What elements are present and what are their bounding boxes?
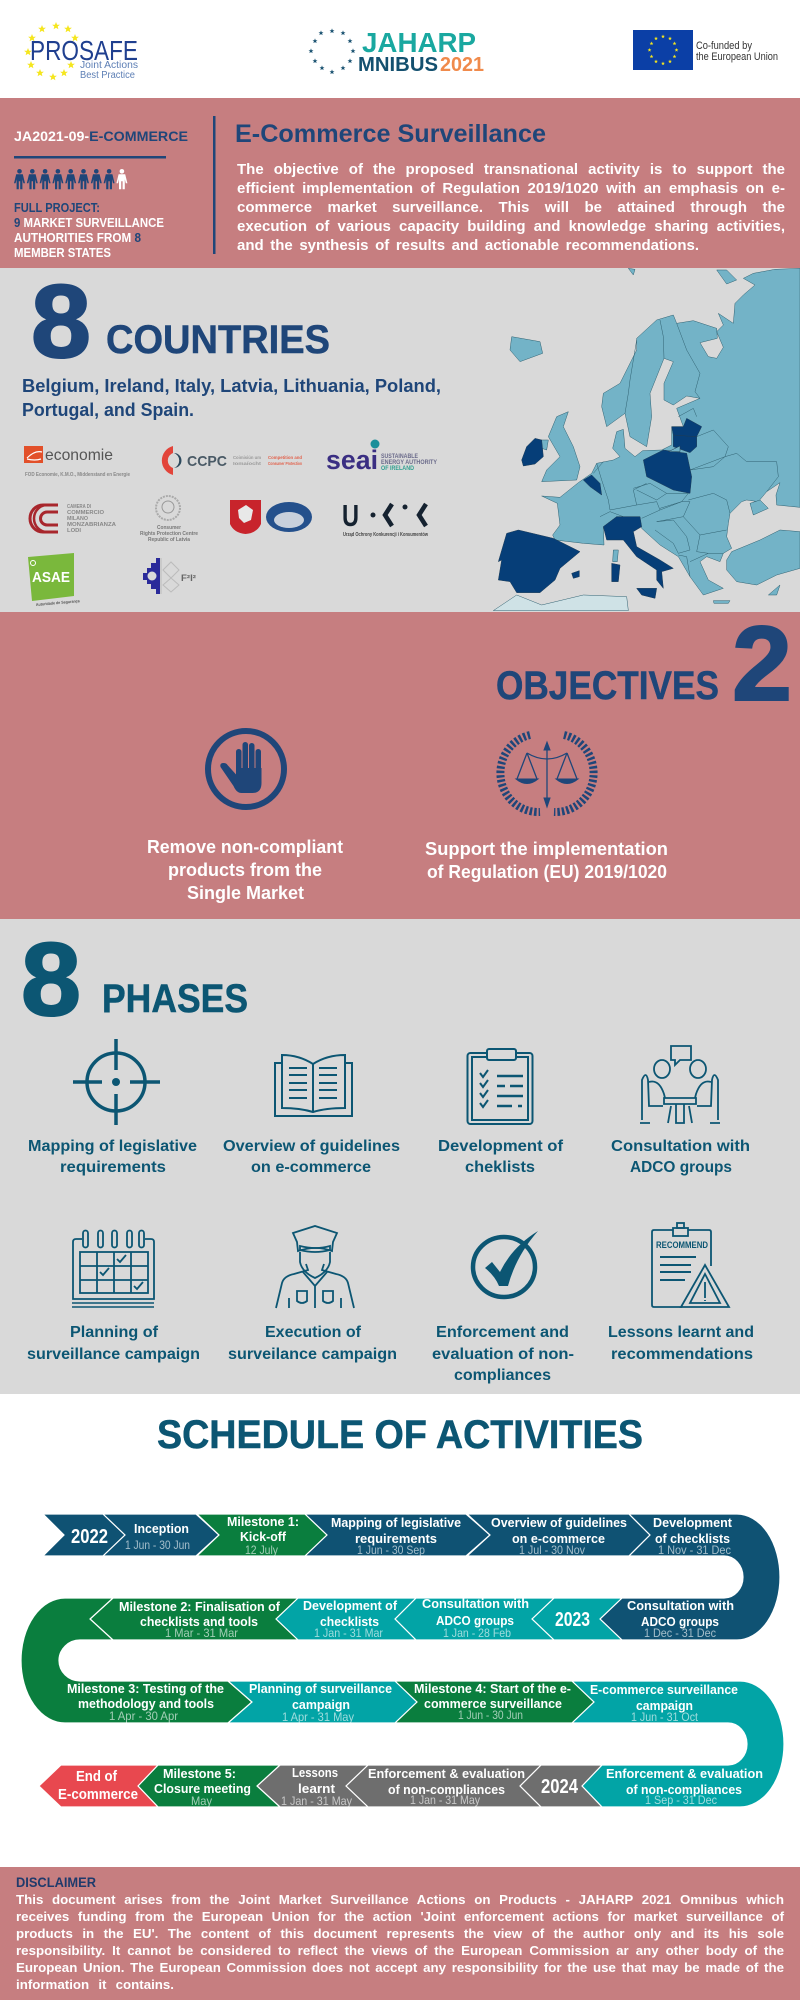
logo: Consumer Rights Protection Centre Latvia: Republic of Latvia [148, 537, 190, 543]
country list: Portugal, and Spain. [22, 400, 194, 420]
full project text [14, 201, 164, 260]
segment: e-commerce campaign and enforcement curve: 1 Jun - 31 Oct [631, 1710, 699, 1724]
segment: e-commerce campaign and enforcement curve [572, 1681, 784, 1807]
segment: milestone 4: 1 Jun - 30 Jun [458, 1708, 523, 1722]
disclaimer text: products in the EU'. The content of this document represents the view of the author only and its his sole [16, 1926, 784, 1941]
logo: Camera di Commercio: COMMERCIO [67, 510, 105, 516]
segment: lessons learnt [257, 1765, 368, 1808]
logo: economie: FOD Economie, K.M.O., Middenstand en Energie [25, 472, 130, 478]
segment: consultation 2023 [395, 1596, 554, 1640]
logo: UOKiK: Urząd Ochrony Konkurencji i Konsumentów [343, 532, 428, 538]
phase 8 label: Lessons learnt and [608, 1324, 754, 1341]
full project text: 9 MARKET SURVEILLANCE [14, 216, 164, 230]
segment: 2023: 2023 [555, 1609, 590, 1631]
phase 1 label: Mapping of legislative [28, 1138, 197, 1155]
segment: e-commerce campaign and enforcement curve: of non-compliances [626, 1782, 742, 1797]
phase 5 label [27, 1324, 200, 1363]
segment: planning: 1 Apr - 31 May [282, 1710, 354, 1724]
segment: mapping: Mapping of legislative [331, 1515, 461, 1530]
logo: ASAE: Autoridade de Segurança [36, 598, 81, 607]
phase 7 label: evaluation of non- [432, 1346, 574, 1363]
segment: milestone 2 [90, 1598, 298, 1640]
segment: overview: 1 Jul - 30 Nov [519, 1543, 585, 1557]
header objective paragraph [237, 161, 785, 254]
full project text: MEMBER STATES [14, 246, 111, 260]
segment: milestone 3 curve: 1 Apr - 30 Apr [109, 1709, 178, 1723]
phase 6 label: Execution of [265, 1324, 362, 1341]
segment: milestone 5: May [191, 1794, 212, 1808]
phase 7 label: Enforcement and [436, 1324, 569, 1341]
icon: stop hand [208, 731, 284, 807]
project code: JA2021-09-E-COMMERCE [14, 128, 188, 144]
panel: disclaimer background: DISCLAIMER [16, 1875, 96, 1890]
header objective paragraph: The objective of the proposed transnational activity is to support the [237, 161, 785, 178]
segment: consultation 2023: 1 Jan - 28 Feb [443, 1626, 511, 1640]
segment: milestone 1: Milestone 1: [227, 1514, 299, 1529]
header objective paragraph: execution of various capacity building and knowledge sharing activities, [237, 218, 785, 235]
panel: countries [0, 264, 800, 612]
logo: SEAI: OF IRELAND [381, 466, 415, 472]
icon: recommend clipboard with warning: RECOMMEND [656, 1240, 708, 1251]
phase 8 label [608, 1324, 754, 1363]
phase 8 label: recommendations [611, 1346, 753, 1363]
segment: enforcement 2024: of non-compliances [388, 1782, 505, 1797]
segment: consultation 2023: ADCO groups [436, 1613, 514, 1628]
segment: mapping: 1 Jun - 30 Sep [357, 1543, 425, 1557]
icon: scales of justice in wreath [500, 735, 594, 812]
segment: milestone 1 [197, 1514, 327, 1557]
segment: consultation 2023: Consultation with [422, 1596, 529, 1611]
logo: F2I2: F²I² [181, 573, 196, 583]
country list: Belgium, Ireland, Italy, Latvia, Lithuania, Poland, [22, 376, 441, 396]
segment: milestone 4: commerce surveillance [424, 1696, 562, 1711]
heading: objectives: OBJECTIVES [496, 664, 719, 708]
panel: objectives [0, 605, 800, 919]
segment: development 2023 [276, 1598, 416, 1640]
segment: end of e-commerce: E-commerce [58, 1786, 138, 1803]
segment: milestone 2: Milestone 2: Finalisation of [119, 1599, 281, 1614]
segment: milestone 5: Closure meeting [154, 1781, 251, 1796]
segment: e-commerce campaign and enforcement curve: campaign [636, 1698, 693, 1713]
objective 2 text: Support the implementation [425, 839, 668, 859]
segment: lessons learnt: 1 Jan - 31 May [281, 1794, 352, 1808]
logo: JAHARP Omnibus 2021: 2021 [440, 54, 484, 76]
objective 1 text: Remove non-compliant [147, 837, 343, 857]
logo: JAHARP Omnibus 2021 [308, 27, 484, 76]
heading: schedule of activities: SCHEDULE OF ACTIVITIES [157, 1413, 643, 1457]
segment: milestone 3 curve [21, 1598, 252, 1723]
segment: development and consultation curve: Consultation with [627, 1598, 734, 1613]
disclaimer text [16, 1892, 784, 1992]
logo: CCPC [162, 446, 302, 475]
segment: planning: campaign [292, 1697, 350, 1712]
segment: 2024: 2024 [541, 1776, 579, 1798]
phase 4 label [611, 1138, 750, 1176]
segment: development and consultation curve: 1 Dec - 31 Dec [644, 1626, 716, 1640]
segment: enforcement 2024: 1 Jan - 31 May [410, 1793, 480, 1807]
phase 2 label: Overview of guidelines [223, 1138, 400, 1155]
segment: development 2023: 1 Jan - 31 Mar [314, 1626, 383, 1640]
logo: economie [24, 446, 130, 478]
panel: phases [0, 919, 800, 1394]
segment: mapping [305, 1514, 490, 1557]
phase 6 label: surveilance campaign [228, 1346, 397, 1363]
segment: development 2023: Development of [303, 1598, 398, 1613]
segment: development 2023: checklists [320, 1614, 379, 1629]
logo: Camera di Commercio: CAMERA DI [67, 504, 91, 510]
logo: ASAE: ASAE [32, 569, 70, 586]
big number 8: 8 [31, 264, 91, 380]
logo: PROSAFE: Best Practice [80, 70, 135, 81]
segment: e-commerce campaign and enforcement curve: Enforcement & evaluation [606, 1766, 763, 1781]
phase 4 label: ADCO groups [630, 1159, 732, 1176]
segment: milestone 1: Kick-off [240, 1529, 287, 1544]
phase 1 label [28, 1138, 197, 1176]
logo: Camera di Commercio: MONZABRIANZA [67, 522, 116, 528]
phase 4 label: Consultation with [611, 1138, 750, 1155]
phase 7 label [432, 1324, 574, 1384]
segment: milestone 3 curve: methodology and tools [78, 1696, 214, 1711]
logo: Consumer Rights Protection Centre Latvia [140, 496, 198, 543]
logo: PROSAFE: PROSAFE [30, 35, 138, 66]
phase 7 label: compliances [454, 1367, 551, 1384]
icon: inspector officer [276, 1226, 354, 1308]
segment: e-commerce campaign and enforcement curve: 1 Sep - 31 Dec [645, 1793, 717, 1807]
segment: development and consultation curve: of checklists [655, 1531, 730, 1546]
map highlight: participating countries [498, 418, 702, 598]
phase 5 label: surveillance campaign [27, 1346, 200, 1363]
segment: planning: Planning of surveillance [249, 1681, 392, 1696]
phase 5 label: Planning of [70, 1324, 159, 1341]
segment: mapping: requirements [355, 1531, 437, 1546]
objective 1 text [147, 837, 343, 903]
segment: milestone 4 [395, 1681, 594, 1723]
country list [22, 376, 441, 420]
full project text: AUTHORITIES FROM 8 [14, 231, 141, 245]
segment: milestone 1: 12 July [245, 1543, 278, 1557]
segment: e-commerce campaign and enforcement curve: E-commerce surveillance [590, 1682, 738, 1697]
header title: E-Commerce Surveillance [235, 120, 546, 148]
logo: Lithuania authority [230, 500, 312, 534]
logo: SEAI: SUSTAINABLE [381, 454, 418, 460]
disclaimer text: receives funding from the European Union for the action 'Joint enforcement actions for market surveillance of [16, 1909, 784, 1924]
logo: UOKiK: U [342, 498, 359, 533]
segment: development and consultation curve [600, 1514, 780, 1640]
phase 3 label: Development of [438, 1138, 564, 1155]
logo: CCPC: Competition and [268, 455, 302, 460]
objective 1 text: Single Market [187, 883, 304, 903]
phase 3 label [438, 1138, 564, 1176]
logo: SEAI: seai [326, 445, 378, 475]
segment: inception: 1 Jun - 30 Jun [125, 1538, 190, 1552]
logo: EU co-funded: the European Union [696, 51, 778, 63]
icon: nine authorities people [14, 169, 127, 189]
phase 3 label: cheklists [465, 1159, 535, 1176]
disclaimer text: This document arises from the Joint Market Surveillance Actions on Products - JAHARP 2021 Omnibus which [16, 1892, 784, 1907]
icon: recommend clipboard with warning [652, 1223, 729, 1307]
logo: CCPC: CCPC [187, 453, 227, 470]
logo: Camera di Commercio: LODI [67, 528, 81, 534]
phase 1 label: requirements [60, 1159, 166, 1176]
logo: economie: economie [45, 447, 113, 464]
segment: end of e-commerce [39, 1765, 158, 1807]
phase 2 label [223, 1138, 400, 1176]
disclaimer text: responsibility. It cannot be considered to reflect the views of the European Commission ar any other body of the [16, 1943, 784, 1958]
logo: Camera di Commercio: MILANO [67, 516, 89, 522]
heading: phases: PHASES [102, 977, 248, 1021]
big number 8: 8 [21, 922, 81, 1038]
segment: 2023 [532, 1598, 622, 1640]
logo: Consumer Rights Protection Centre Latvia: Consumer [157, 525, 181, 531]
segment: lessons learnt: Lessons [292, 1765, 338, 1780]
logo: ASAE [28, 553, 81, 607]
segment: milestone 5 [138, 1765, 280, 1808]
logo: JAHARP Omnibus 2021: JAHARP [362, 27, 476, 58]
icon: clipboard checklist [468, 1049, 532, 1124]
segment: inception [103, 1514, 219, 1556]
objective 2 text [425, 839, 668, 882]
timeline: schedule ribbon [21, 1514, 784, 1808]
segment: 2022: 2022 [71, 1526, 108, 1548]
header objective paragraph: and the synthesis of results and actionable recommendations. [237, 237, 699, 254]
logo: Consumer Rights Protection Centre Latvia: Rights Protection Centre [140, 531, 198, 537]
logo: UOKiK [342, 498, 428, 538]
phase 6 label [228, 1324, 397, 1363]
icon: check mark [473, 1231, 538, 1297]
segment: milestone 3 curve: Milestone 3: Testing of the [67, 1681, 224, 1696]
panel: header band [0, 98, 800, 268]
header objective paragraph: commerce market surveillance. This will be attained through the [237, 199, 785, 216]
heading: countries: COUNTRIES [106, 318, 330, 362]
logo: JAHARP Omnibus 2021: MNIBUS [358, 54, 438, 76]
header objective paragraph: efficient implementation of Regulation 2019/1020 with an emphasis on e- [237, 180, 785, 197]
segment: enforcement 2024: Enforcement & evaluation [368, 1766, 525, 1781]
logo: SEAI [326, 440, 437, 475]
segment: milestone 2: 1 Mar - 31 Mar [165, 1626, 238, 1640]
icon: consultation [640, 1046, 720, 1123]
segment: enforcement 2024 [346, 1765, 541, 1807]
disclaimer text: information it contains. [16, 1977, 174, 1992]
logo: CCPC: Consumer Protection [268, 461, 302, 466]
logo: CCPC: Coimisiún um [233, 455, 261, 460]
segment: development and consultation curve: ADCO groups [641, 1614, 719, 1629]
segment: overview: on e-commerce [512, 1531, 605, 1546]
logo: Camera di Commercio [30, 504, 116, 534]
full project text: FULL PROJECT: [14, 201, 100, 215]
logo: CCPC: Iomaíocht [233, 461, 262, 466]
segment: 2022 [43, 1514, 125, 1556]
icon: open book [275, 1055, 352, 1116]
logo: PROSAFE [24, 22, 138, 81]
segment: overview: Overview of guidelines [491, 1515, 627, 1530]
segment: 2024 [520, 1765, 602, 1807]
objective 1 text: products from the [168, 860, 322, 880]
logo: EU co-funded [633, 30, 778, 70]
segment: milestone 5: Milestone 5: [163, 1766, 236, 1781]
segment: milestone 4: Milestone 4: Start of the e- [414, 1681, 571, 1696]
segment: development and consultation curve: 1 Nov - 31 Dec [658, 1543, 731, 1557]
segment: inception: Inception [134, 1521, 189, 1536]
panel: disclaimer background [0, 1867, 800, 2000]
segment: milestone 2: checklists and tools [140, 1614, 258, 1629]
segment: overview [467, 1514, 650, 1557]
phase 2 label: on e-commerce [251, 1159, 371, 1176]
objective 2 text: of Regulation (EU) 2019/1020 [427, 862, 667, 882]
segment: end of e-commerce: End of [76, 1768, 118, 1785]
disclaimer text: European Union. The European Commission does not accept any responsibility for the use that may be made of the [16, 1960, 784, 1975]
segment: development and consultation curve: Development [653, 1515, 733, 1530]
big number 2: 2 [732, 605, 792, 723]
logo: F2I2 [143, 558, 196, 594]
segment: lessons learnt: learnt [298, 1781, 336, 1796]
segment: planning [228, 1681, 417, 1724]
logo: SEAI: ENERGY AUTHORITY [381, 460, 437, 466]
map of Europe [493, 268, 800, 611]
logo: PROSAFE: Joint Actions [80, 60, 138, 71]
logo: EU co-funded: Co-funded by [696, 40, 752, 52]
icon: target [73, 1039, 160, 1125]
icon: calendar [72, 1230, 154, 1307]
